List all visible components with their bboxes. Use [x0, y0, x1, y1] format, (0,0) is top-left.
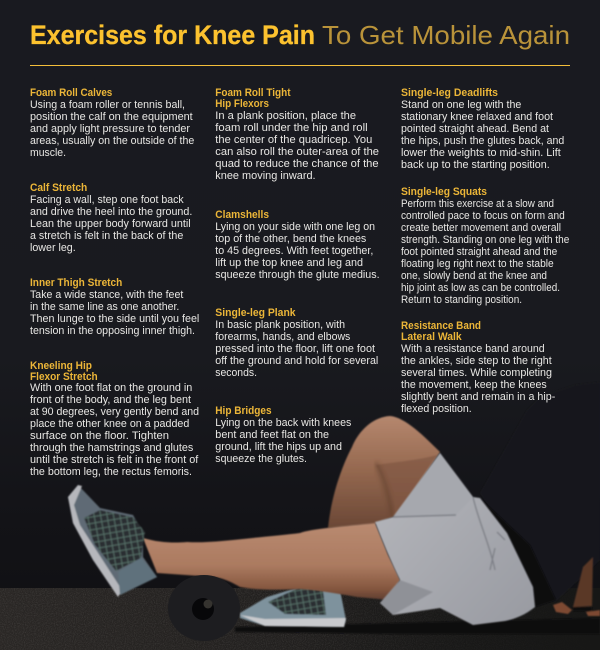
- text block: Foam Roll Tight Hip Flexors: quad to reduce the chance of the: [215, 158, 379, 170]
- text block: Foam Roll Calves: muscle.: [30, 147, 66, 159]
- text block: Foam Roll Calves: areas, usually on the outside of the: [30, 135, 194, 147]
- pants shadow: [480, 498, 556, 607]
- text block: Single-leg Plank: [215, 307, 378, 379]
- text block: Inner Thigh Stretch: Then lunge to the side until you feel: [30, 313, 199, 325]
- text block: Resistance Band Lateral Walk: Lateral Walk: [401, 331, 462, 343]
- text block: Foam Roll Calves: Foam Roll Calves: [30, 87, 112, 99]
- floor: [0, 588, 600, 650]
- text block: Kneeling Hip Flexor Stretch: Flexor Stretch: [30, 371, 98, 383]
- text block: Resistance Band Lateral Walk: With a resistance band around: [401, 343, 545, 355]
- text block: Single-leg Squats: controlled pace to focus on form and: [401, 210, 565, 222]
- text block: Calf Stretch: Calf Stretch: [30, 182, 87, 194]
- text block: Foam Roll Tight Hip Flexors: In a plank position, place the: [215, 110, 356, 122]
- text block: Hip Bridges: Hip Bridges: [215, 405, 272, 417]
- text block: Clamshells: squeeze through the glute medius.: [215, 269, 380, 281]
- text block: Calf Stretch: [30, 182, 192, 254]
- text block: Foam Roll Tight Hip Flexors: the center of the quadricep. You: [215, 134, 372, 146]
- text block: Kneeling Hip Flexor Stretch: With one foot flat on the ground in: [30, 382, 192, 394]
- text block: Single-leg Plank: Single-leg Plank: [215, 307, 296, 319]
- divider: [30, 65, 570, 66]
- raised leg: [328, 416, 440, 528]
- text block: Single-leg Squats: strength. Standing on one leg with the: [401, 234, 569, 246]
- text block: Kneeling Hip Flexor Stretch: the bottom leg, the rectus femoris.: [30, 466, 192, 478]
- text block: Single-leg Plank: forearms, hands, and elbows: [215, 331, 350, 343]
- text block: Calf Stretch: lower leg.: [30, 242, 76, 254]
- text block: Resistance Band Lateral Walk: Resistance Band: [401, 320, 481, 332]
- text block: Inner Thigh Stretch: Inner Thigh Stretch: [30, 277, 122, 289]
- title: Exercises for Knee Pain: [30, 20, 315, 50]
- text block: Foam Roll Tight Hip Flexors: [215, 87, 379, 182]
- text block: Single-leg Squats: create better movement and overall: [401, 222, 561, 234]
- text block: Inner Thigh Stretch: in the same line as one another.: [30, 301, 179, 313]
- text block: Single-leg Plank: off the ground and hold for several: [215, 355, 378, 367]
- text block: Clamshells: lift up the top knee and leg and: [215, 257, 363, 269]
- text block: Kneeling Hip Flexor Stretch: through the hamstrings and glutes: [30, 442, 193, 454]
- arm and hand: [553, 557, 600, 616]
- left shoe: [68, 485, 157, 597]
- text block: Foam Roll Calves: and apply light pressure to tender: [30, 123, 190, 135]
- text block: Foam Roll Tight Hip Flexors: Foam Roll Tight: [215, 87, 291, 99]
- text block: Single-leg Plank: In basic plank position, with: [215, 319, 345, 331]
- text block: Calf Stretch: and drive the heel into the ground.: [30, 206, 192, 218]
- text block: Foam Roll Calves: position the calf on the equipment: [30, 111, 193, 123]
- text block: Inner Thigh Stretch: Take a wide stance, with the feet: [30, 289, 183, 301]
- text block: Kneeling Hip Flexor Stretch: place the other knee on a padded: [30, 418, 189, 430]
- text block: Hip Bridges: Lying on the back with knees: [215, 417, 351, 429]
- text block: Resistance Band Lateral Walk: the movement, keep the knees: [401, 379, 547, 391]
- foam roller: [168, 575, 240, 641]
- shorts: [375, 453, 535, 625]
- text block: Single-leg Deadlifts: pointed straight ahead. Bend at: [401, 123, 549, 135]
- text block: Single-leg Squats: one, slowly bend at the knee and: [401, 270, 547, 282]
- right shoe on floor: [240, 587, 346, 627]
- text block: Hip Bridges: bent and feet flat on the: [215, 429, 329, 441]
- text block: Single-leg Deadlifts: the hips, push the glutes back, and: [401, 135, 564, 147]
- text block: Single-leg Plank: pressed into the floor, lift one foot: [215, 343, 375, 355]
- shirt: [480, 382, 600, 602]
- text block: Clamshells: Lying on your side with one leg on: [215, 221, 375, 233]
- text block: Clamshells: top of the other, bend the knees: [215, 233, 366, 245]
- text block: Inner Thigh Stretch: [30, 277, 199, 337]
- title: To Get Mobile Again: [322, 20, 570, 50]
- text block: Foam Roll Tight Hip Flexors: Hip Flexors: [215, 98, 269, 110]
- title: [30, 20, 570, 50]
- text block: Single-leg Plank: seconds.: [215, 367, 257, 379]
- text block: Single-leg Squats: [401, 186, 569, 306]
- text block: Resistance Band Lateral Walk: [401, 320, 556, 415]
- text block: Single-leg Squats: foot pointed straight ahead and the: [401, 246, 557, 258]
- text block: Kneeling Hip Flexor Stretch: surface on the floor. Tighten: [30, 430, 169, 442]
- text block: Single-leg Squats: Perform this exercise at a slow and: [401, 198, 554, 210]
- text block: Hip Bridges: [215, 405, 351, 465]
- text block: Hip Bridges: squeeze the glutes.: [215, 453, 307, 465]
- text block: Single-leg Deadlifts: Single-leg Deadlifts: [401, 87, 498, 99]
- text block: Hip Bridges: ground, lift the hips up and: [215, 441, 342, 453]
- text block: Kneeling Hip Flexor Stretch: Kneeling Hip: [30, 360, 92, 372]
- extended leg: [143, 523, 400, 600]
- text block: Clamshells: [215, 209, 380, 281]
- text block: Kneeling Hip Flexor Stretch: at 90 degrees, very gently bend and: [30, 406, 199, 418]
- text block: Foam Roll Calves: Using a foam roller or tennis ball,: [30, 99, 185, 111]
- text block: Resistance Band Lateral Walk: several times. While completing: [401, 367, 552, 379]
- text block: Clamshells: Clamshells: [215, 209, 269, 221]
- text block: Single-leg Deadlifts: back up to the starting position.: [401, 159, 550, 171]
- text block: Calf Stretch: a stretch is felt in the back of the: [30, 230, 183, 242]
- text block: Single-leg Deadlifts: stationary knee relaxed and foot: [401, 111, 553, 123]
- text block: Single-leg Deadlifts: Stand on one leg with the: [401, 99, 521, 111]
- text block: Foam Roll Tight Hip Flexors: can also roll the outer-area of the: [215, 146, 379, 158]
- text block: Resistance Band Lateral Walk: the ankles, side step to the right: [401, 355, 552, 367]
- text block: Clamshells: to 45 degrees. With feet together,: [215, 245, 373, 257]
- text block: Foam Roll Tight Hip Flexors: knee moving inward.: [215, 170, 316, 182]
- text block: Resistance Band Lateral Walk: flexed position.: [401, 403, 472, 415]
- text block: Single-leg Squats: Return to standing position.: [401, 294, 522, 306]
- text block: Single-leg Squats: hip joint as low as can be controlled.: [401, 282, 560, 294]
- text block: Kneeling Hip Flexor Stretch: until the stretch is felt in the front of: [30, 454, 198, 466]
- text block: Resistance Band Lateral Walk: slightly bent and remain in a hip-: [401, 391, 556, 403]
- text block: Single-leg Deadlifts: lower the weights to mid-shin. Lift: [401, 147, 561, 159]
- text block: Foam Roll Calves: [30, 87, 194, 159]
- text block: Single-leg Deadlifts: [401, 87, 564, 171]
- text block: Kneeling Hip Flexor Stretch: [30, 360, 199, 478]
- text block: Foam Roll Tight Hip Flexors: foam roll under the hip and roll: [215, 122, 368, 134]
- text block: Inner Thigh Stretch: tension in the opposing inner thigh.: [30, 325, 195, 337]
- text block: Single-leg Squats: floating leg right next to the stable: [401, 258, 554, 270]
- text block: Single-leg Squats: Single-leg Squats: [401, 186, 487, 198]
- text block: Calf Stretch: Facing a wall, step one foot back: [30, 194, 184, 206]
- text block: Calf Stretch: Lean the upper body forward until: [30, 218, 191, 230]
- text block: Kneeling Hip Flexor Stretch: front of the body, and the leg bent: [30, 394, 191, 406]
